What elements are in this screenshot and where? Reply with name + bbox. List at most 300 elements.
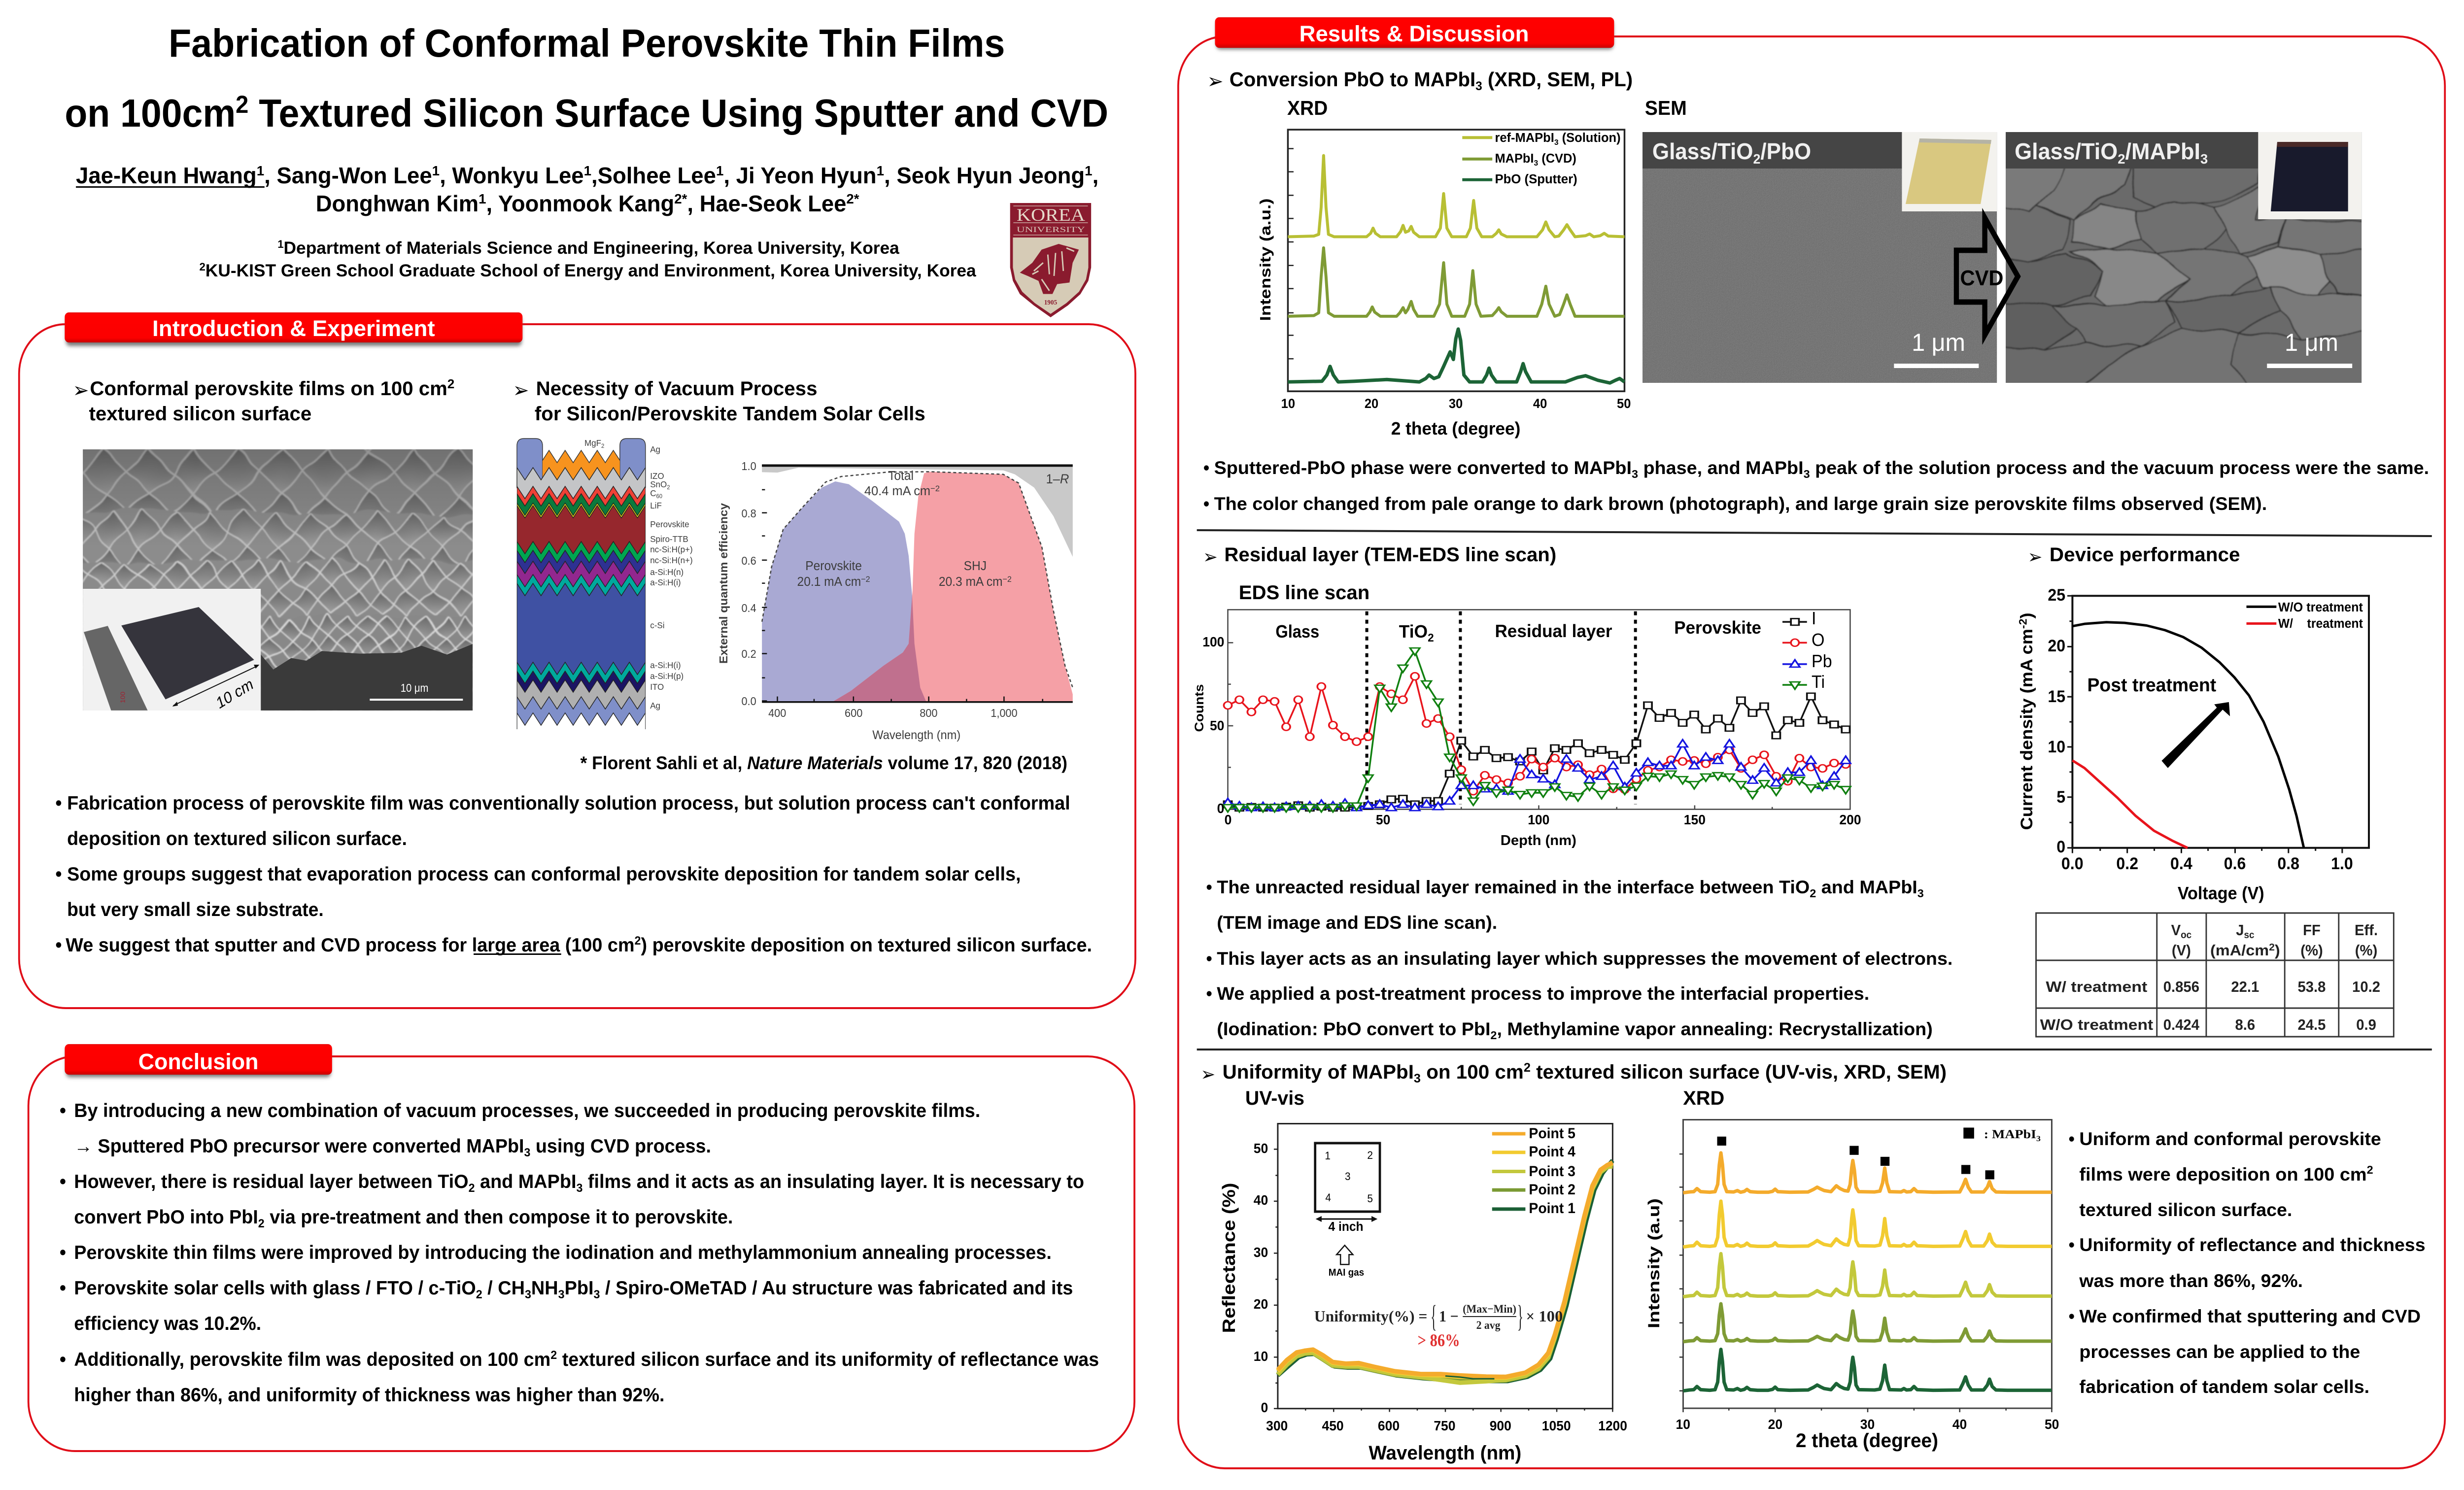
formula: uniformity — [1314, 1300, 1563, 1350]
chart: J-V curve: Voltage (V) — [2178, 883, 2264, 903]
authors — [76, 163, 1098, 216]
chart: J-V curve: 25 — [2048, 586, 2065, 605]
authors: 1 — [479, 191, 486, 206]
conclusion bullet text: Perovskite solar cells with glass / FTO / c-TiO — [74, 1278, 465, 1299]
bullets: uniformity: • — [2069, 1234, 2075, 1255]
chart: external quantum efficiency: 0.6 — [741, 554, 756, 567]
tandem cell layer stack diagram — [516, 438, 692, 729]
SEM image: Glass/TiO2/MAPbI3 — [1995, 128, 2376, 387]
SEM image: Glass/TiO2/PbO: 2 — [1753, 151, 1760, 167]
conclusion bullet text: • — [60, 1171, 66, 1192]
panel: Results & Discussion — [1178, 17, 2445, 1468]
conclusion bullet text: 3 — [524, 1146, 530, 1159]
chart: external quantum efficiency: 1,000 — [991, 707, 1018, 719]
conclusion bullet text: textured silicon surface and its uniformity of reflectance was — [557, 1349, 1099, 1370]
chart: XRD uniformity: Intensity (a.u) — [1645, 1198, 1663, 1328]
SEM image: Glass/TiO2/PbO — [1643, 132, 1997, 383]
inset: sample measurement points: 5 — [1367, 1192, 1373, 1205]
chart: XRD uniformity: 50 — [2045, 1416, 2059, 1432]
chart: UV-vis reflectance: Point 4 — [1529, 1144, 1576, 1160]
bullets: residual layer: 3 — [1917, 887, 1924, 900]
bullets: residual layer: 2 — [1810, 887, 1816, 900]
inset: sample measurement points: 4 inch — [1329, 1219, 1364, 1234]
chart: J-V curve: 0.0 — [2061, 854, 2084, 873]
table: device parameters: 0.856 — [2163, 979, 2199, 995]
chart: UV-vis reflectance — [1219, 1120, 2426, 1464]
inset: sample measurement points: 2 — [1367, 1149, 1373, 1161]
heading: device performance: ➢ — [2028, 546, 2043, 568]
bullets: residual layer: • — [1206, 877, 1212, 897]
authors: 2* — [674, 191, 687, 206]
chart: EDS line scan: Residual layer — [1495, 621, 1612, 641]
chart: XRD of PbO and MAPbI3: (Solution) — [1559, 131, 1621, 145]
chart: UV-vis reflectance: Point 1 — [1529, 1200, 1575, 1217]
tandem cell layer stack diagram: 2 — [601, 443, 604, 449]
bullets: uniformity: films were deposition on 100 cm — [2079, 1164, 2344, 1185]
conclusion bullet text: using CVD process. — [530, 1136, 711, 1157]
conclusion bullet text: films and it acts as an insulating layer. It is necessary to — [582, 1171, 1084, 1192]
panel: Conclusion — [29, 1044, 1134, 1451]
conclusion bullet text: Additionally, perovskite film was deposited on 100 cm — [74, 1349, 539, 1370]
chart: UV-vis reflectance: Point 2 — [1529, 1182, 1575, 1198]
table: device parameters: 0.9 — [2356, 1016, 2376, 1033]
chart: EDS line scan: 50 — [1210, 717, 1224, 733]
heading: necessity of vacuum process: for Silicon/Perovskite Tandem Solar Cells — [535, 403, 925, 425]
affiliations — [199, 238, 977, 280]
chart: XRD of PbO and MAPbI3: 20 — [1365, 396, 1378, 411]
heading: uniformity: 2 — [1524, 1061, 1531, 1075]
chart: EDS line scan: 100 — [1528, 812, 1549, 827]
chart: UV-vis reflectance: Point 5 — [1529, 1125, 1575, 1142]
SEM image: Glass/TiO2/MAPbI3: /MAPbI — [2125, 139, 2200, 164]
tandem cell layer stack diagram: Perovskite — [650, 519, 689, 529]
bullets: residual layer: • — [1206, 983, 1212, 1004]
chart: XRD uniformity: 20 — [1768, 1416, 1782, 1432]
formula: uniformity: 1 − — [1439, 1307, 1459, 1325]
bullets: uniformity: • — [2069, 1306, 2075, 1326]
chart: UV-vis reflectance: 10 — [1254, 1348, 1268, 1364]
bullets: uniformity — [2069, 1128, 2426, 1397]
section tag: Conclusion: Conclusion — [138, 1050, 258, 1074]
inset: sample measurement points: MAI gas — [1329, 1267, 1364, 1278]
intro bullet text: • — [55, 793, 62, 814]
chart: EDS line scan: 0 — [1217, 800, 1224, 816]
chart: external quantum efficiency: −2 — [930, 484, 940, 493]
chart: XRD of PbO and MAPbI3: (CVD) — [1538, 151, 1576, 166]
intro bullet text: but very small size substrate. — [67, 899, 324, 920]
chart: EDS line scan: I — [1812, 609, 1816, 628]
table: device parameters: 10.2 — [2352, 979, 2380, 995]
bullets: uniformity: fabrication of tandem solar cells. — [2079, 1376, 2369, 1397]
chart: EDS line scan: Depth (nm) — [1501, 832, 1576, 848]
conclusion bullet text — [60, 1100, 1099, 1406]
heading: conformal films: textured silicon surface — [89, 403, 311, 425]
label: SEM: SEM — [1645, 97, 1687, 119]
section tag: Introduction & Experiment — [65, 312, 522, 346]
heading: uniformity: ➢ — [1200, 1063, 1215, 1085]
conclusion bullet text: • — [60, 1242, 66, 1263]
chart: external quantum efficiency — [718, 460, 1073, 742]
tandem cell layer stack diagram: c-Si — [650, 620, 664, 630]
chart: J-V curve: 1.0 — [2331, 854, 2353, 873]
chart: UV-vis reflectance: 30 — [1254, 1244, 1268, 1260]
chart: UV-vis reflectance: 1050 — [1542, 1418, 1571, 1433]
title — [65, 22, 1108, 135]
logo: Korea University crest: UNIVERSITY — [1017, 226, 1085, 234]
table: device parameters: J — [2236, 922, 2244, 939]
table: device parameters: 53.8 — [2297, 979, 2326, 995]
chart: UV-vis reflectance: Point 3 — [1529, 1163, 1575, 1180]
authors: , Hae-Seok Lee — [687, 191, 846, 216]
chart: XRD uniformity: 3 — [2036, 1135, 2041, 1143]
chart: UV-vis reflectance: 1200 — [1598, 1418, 1627, 1433]
chart: XRD of PbO and MAPbI3 — [1257, 130, 1631, 439]
chart: external quantum efficiency: 400 — [768, 707, 786, 719]
chart: XRD of PbO and MAPbI3: ref-MAPbI — [1495, 131, 1552, 145]
chart: EDS line scan: Pb — [1812, 651, 1832, 671]
conclusion bullet text: / Spiro-OMeTAD / Au structure was fabricated and its — [600, 1278, 1073, 1299]
tandem cell layer stack diagram: LiF — [650, 501, 662, 510]
bullets: residual layer: , Methylamine vapor annealing: Recrystallization) — [1497, 1018, 1933, 1039]
label: EDS line scan: EDS line scan — [1239, 582, 1369, 604]
table: device parameters: 8.6 — [2235, 1016, 2255, 1033]
tandem cell layer stack diagram: 60 — [656, 493, 663, 500]
authors: 1 — [877, 163, 884, 178]
chart: UV-vis reflectance: 50 — [1254, 1140, 1268, 1156]
bullets: residual layer: 2 — [1490, 1029, 1497, 1042]
chart: J-V curve: 0.4 — [2170, 854, 2192, 873]
chart: J-V curve — [2017, 586, 2369, 903]
chart: external quantum efficiency: 0.2 — [741, 647, 756, 660]
tandem cell layer stack diagram: a-Si:H(p) — [650, 671, 684, 681]
chart: external quantum efficiency: 0.8 — [741, 507, 756, 520]
chart: external quantum efficiency: −2 — [861, 575, 870, 584]
panel border — [19, 324, 1135, 1008]
chart: J-V curve: -2 — [2017, 619, 2029, 629]
table: device parameters: W/O treatment — [2040, 1016, 2153, 1033]
bullets: uniformity: processes can be applied to the — [2079, 1341, 2360, 1362]
conclusion bullet text: convert PbO into PbI — [74, 1207, 254, 1228]
bullets: conversion: 3 — [1804, 468, 1810, 480]
chart: EDS line scan: TiO — [1399, 622, 1427, 642]
chart: external quantum efficiency: 600 — [845, 707, 862, 719]
bullets: conversion: • — [1203, 493, 1209, 514]
intro bullet text: We suggest that sputter and CVD process for large area (100 cm — [66, 935, 620, 956]
chart: external quantum efficiency: Total — [888, 469, 914, 483]
chart: XRD of PbO and MAPbI3: 2 theta (degree) — [1391, 419, 1520, 439]
chart: EDS line scan: 200 — [1839, 812, 1861, 827]
chart: XRD of PbO and MAPbI3: 30 — [1449, 396, 1463, 411]
tandem cell layer stack diagram: nc-Si:H(p+) — [650, 544, 693, 554]
inset photo: 10 cm sample: 100 — [119, 691, 126, 703]
bullets: conversion — [1203, 457, 2429, 514]
authors: 1 — [584, 163, 591, 178]
conclusion bullet text: 2 — [469, 1181, 475, 1194]
chart: EDS line scan: 100 — [1202, 634, 1224, 649]
SEM image: Glass/TiO2/PbO: /PbO — [1760, 139, 1811, 164]
chart: external quantum efficiency: External quantum efficiency — [718, 503, 730, 664]
title: Fabrication of Conformal Perovskite Thin Films — [169, 22, 1005, 65]
photo inset: MAPbI3 film — [2258, 132, 2361, 219]
bullets: uniformity: • — [2069, 1128, 2075, 1149]
table: device parameters: 0.424 — [2163, 1016, 2199, 1033]
chart: external quantum efficiency: 1.0 — [741, 460, 756, 473]
bullets: residual layer: (TEM image and EDS line scan). — [1217, 912, 1497, 933]
SEM image: textured silicon pyramids — [83, 449, 473, 711]
inset: sample measurement points: 4 — [1325, 1191, 1331, 1204]
heading: conformal films: Conformal perovskite films on 100 cm — [90, 378, 426, 400]
authors: 2* — [846, 191, 859, 206]
logo: Korea University crest: 1905 — [1044, 299, 1057, 306]
tandem cell layer stack diagram: a-Si:H(n) — [650, 567, 684, 577]
chart: XRD of PbO and MAPbI3: 10 — [1281, 396, 1295, 411]
heading: conversion PbO to MAPbI3: (XRD, SEM, PL) — [1482, 68, 1633, 91]
chart: UV-vis reflectance: 450 — [1322, 1418, 1344, 1433]
conclusion bullet text: 2 — [476, 1287, 482, 1301]
table: device parameters: (%) — [2300, 942, 2323, 959]
affiliations: 2 — [199, 261, 205, 273]
inset photo: 10 cm sample — [83, 589, 261, 712]
intro bullet text: • — [55, 864, 62, 885]
conclusion bullet text: → Sputtered PbO precursor were converted MAPbI — [74, 1136, 514, 1157]
intro bullet text: deposition on textured silicon surface. — [67, 828, 407, 849]
chart: XRD of PbO and MAPbI3: 3 — [1554, 138, 1559, 147]
title: 2 — [236, 91, 248, 118]
chart: J-V curve: Post treatment — [2087, 675, 2216, 695]
formula: uniformity: (Max−Min) — [1463, 1302, 1516, 1315]
conclusion bullet text: By introducing a new combination of vacuum processes, we succeeded in producing perovskite films. — [74, 1100, 980, 1121]
conclusion bullet text: 3 — [594, 1287, 600, 1301]
authors: , Yoonmook Kang — [486, 191, 674, 216]
bullets: residual layer: The unreacted residual layer remained in the interface between TiO — [1217, 877, 1766, 897]
conclusion bullet text: higher than 86%, and uniformity of thickness was higher than 92%. — [74, 1385, 665, 1406]
conclusion bullet text: • — [60, 1349, 66, 1370]
conclusion bullet text: / CH — [482, 1278, 525, 1299]
bullets: uniformity: 2 — [2367, 1163, 2373, 1176]
conclusion bullet text: PbI — [565, 1278, 594, 1299]
title: Textured Silicon Surface Using Sputter and CVD — [248, 92, 1108, 135]
affiliations: 1 — [277, 238, 284, 250]
chart: XRD of PbO and MAPbI3: 40 — [1533, 396, 1547, 411]
chart: UV-vis reflectance: Reflectance (%) — [1219, 1183, 1239, 1333]
table: device parameters: FF — [2303, 922, 2321, 939]
authors: , Sang-Won Lee — [264, 163, 432, 188]
formula: uniformity: { — [1431, 1300, 1437, 1333]
conclusion bullet text: • — [60, 1278, 66, 1299]
inset photo: 10 cm sample: 10 cm — [213, 675, 256, 712]
inset: sample measurement points: 3 — [1345, 1170, 1351, 1183]
table: device parameters: Eff. — [2355, 922, 2378, 939]
chart: XRD uniformity — [1645, 1120, 2059, 1452]
tandem cell layer stack diagram: IZO — [650, 471, 664, 481]
SEM image: Glass/TiO2/PbO: 1 μm — [1912, 329, 1965, 356]
inset: sample measurement points: 1 — [1325, 1150, 1331, 1162]
chart: EDS line scan: Glass — [1275, 622, 1319, 642]
section tag: Introduction & Experiment: Introduction & Experiment — [152, 316, 435, 341]
authors: 1 — [716, 163, 723, 178]
conclusion bullet text: and MAPbI — [475, 1171, 576, 1192]
table: device parameters: sc — [2244, 930, 2255, 941]
chart: EDS line scan: Counts — [1193, 684, 1206, 732]
bullets: conversion: peak of the solution process and the vacuum process were the same. — [1810, 457, 2429, 478]
tandem cell layer stack diagram: a-Si:H(i) — [650, 577, 681, 587]
chart: EDS line scan: Ti — [1812, 672, 1825, 692]
heading: conversion PbO to MAPbI3: 3 — [1475, 79, 1482, 93]
chart: XRD uniformity: 30 — [1860, 1416, 1875, 1432]
formula: uniformity: } — [1517, 1300, 1523, 1333]
heading: conformal films: ➢ — [72, 378, 89, 402]
chart: J-V curve: 10 — [2048, 738, 2065, 756]
heading: residual layer: ➢ — [1203, 546, 1218, 568]
conclusion bullet text: 2 — [550, 1348, 557, 1361]
conclusion bullet text: 3 — [558, 1287, 565, 1301]
tandem cell layer stack diagram: SnO — [650, 479, 667, 489]
chart: XRD of PbO and MAPbI3: 50 — [1617, 396, 1631, 411]
bullets: conversion: • — [1203, 457, 1209, 478]
authors: 1 — [1085, 163, 1093, 178]
chart: EDS line scan: 0 — [1225, 812, 1232, 827]
heading: necessity of vacuum process — [513, 378, 925, 425]
bullets: residual layer: • — [1206, 948, 1212, 969]
conclusion bullet text: via pre-treatment and then compose it to perovskite. — [265, 1207, 733, 1228]
SEM image: Glass/TiO2/PbO: Glass/TiO — [1652, 139, 1752, 164]
SEM image: Glass/TiO2/MAPbI3: 2 — [2118, 151, 2125, 167]
conclusion bullet text: • — [60, 1100, 66, 1121]
chart: XRD uniformity: 40 — [1952, 1416, 1967, 1432]
bullets: uniformity: was more than 86%, 92%. — [2079, 1270, 2303, 1291]
chart: external quantum efficiency: Wavelength (nm) — [872, 728, 960, 742]
chart: J-V curve: W/O treatment — [2278, 600, 2363, 614]
heading: necessity of vacuum process: Necessity of Vacuum Process — [536, 378, 817, 400]
chart: external quantum efficiency: Perovskite — [805, 559, 862, 573]
heading: conversion PbO to MAPbI3 — [1207, 68, 1633, 93]
chart: J-V curve: 15 — [2048, 687, 2065, 706]
table: device parameters: V — [2171, 922, 2181, 939]
authors: ,Solhee Lee — [591, 163, 716, 188]
chart: EDS line scan: 2 — [1428, 631, 1434, 644]
chart: external quantum efficiency: 20.3 mA cm — [939, 575, 1003, 589]
section tag: Results & Discussion: Results & Discussion — [1300, 22, 1529, 46]
formula: uniformity: × — [1526, 1307, 1535, 1325]
conclusion bullet text: efficiency was 10.2%. — [74, 1313, 261, 1334]
chart: J-V curve: treatment — [2307, 616, 2363, 631]
arrow: post treatment improvement — [2161, 702, 2230, 768]
label: XRD uniformity: XRD — [1683, 1087, 1724, 1109]
chart: J-V curve: 0.6 — [2224, 854, 2246, 873]
heading: uniformity: 3 — [1414, 1072, 1421, 1085]
chart: external quantum efficiency: 800 — [920, 707, 937, 719]
authors: , — [1093, 163, 1098, 188]
intro bullet text: ) perovskite deposition on textured silicon surface. — [641, 935, 1092, 956]
bullets: conversion: phase, and MAPbI — [1638, 457, 1804, 478]
intro bullet text — [55, 793, 1092, 956]
chart: XRD of PbO and MAPbI3: PbO (Sputter) — [1495, 172, 1577, 186]
arrow: CVD conversion: CVD — [1960, 266, 2003, 290]
chart: J-V curve: 0.8 — [2277, 854, 2299, 873]
conclusion bullet text: However, there is residual layer between TiO — [74, 1171, 458, 1192]
formula: uniformity: 100 — [1539, 1307, 1563, 1325]
table: device parameters: W/ treatment — [2046, 979, 2147, 995]
chart: external quantum efficiency: 0.4 — [741, 602, 756, 614]
chart: UV-vis reflectance: 600 — [1378, 1418, 1400, 1433]
table: device parameters: (mA/cm — [2210, 942, 2263, 959]
table: device parameters: 24.5 — [2297, 1016, 2326, 1033]
label: XRD: XRD — [1287, 97, 1328, 119]
authors: , Ji Yeon Hyun — [723, 163, 877, 188]
chart: EDS line scan: Perovskite — [1674, 618, 1761, 638]
chart: UV-vis reflectance: 0 — [1261, 1399, 1268, 1415]
table: device parameters: ) — [2275, 942, 2280, 959]
photo inset: PbO film — [1902, 132, 1997, 211]
heading: uniformity: on 100 cm — [1421, 1061, 1524, 1083]
SEM image: Glass/TiO2/MAPbI3: Glass/TiO — [2015, 139, 2114, 164]
chart: EDS line scan: O — [1812, 630, 1825, 650]
logo: Korea University crest — [1010, 203, 1091, 317]
chart: EDS line scan — [1193, 609, 1861, 848]
chart: J-V curve: 5 — [2056, 788, 2065, 807]
chart: J-V curve: W/ — [2278, 616, 2293, 631]
heading: uniformity: textured silicon surface (UV-vis, XRD, SEM) — [1531, 1061, 1947, 1083]
chart: external quantum efficiency: 0.0 — [741, 695, 756, 708]
chart: external quantum efficiency: SHJ — [964, 559, 987, 573]
table: device parameters: (V) — [2172, 942, 2191, 959]
tandem cell layer stack diagram: Ag — [650, 444, 660, 454]
authors: Jae-Keun Hwang — [76, 163, 248, 188]
heading: conformal films: 2 — [447, 377, 454, 391]
chart: UV-vis reflectance: 900 — [1490, 1418, 1511, 1433]
table: device parameters: 22.1 — [2231, 979, 2259, 995]
heading: necessity of vacuum process: ➢ — [513, 378, 529, 402]
chart: J-V curve: Current density (mA cm — [2018, 630, 2036, 830]
bullets: residual layer: We applied a post-treatment process to improve the interfacial properties. — [1217, 983, 1869, 1004]
chart: XRD uniformity: 10 — [1676, 1416, 1690, 1432]
chart: XRD of PbO and MAPbI3: MAPbI — [1495, 151, 1533, 166]
conclusion bullet text: 3 — [525, 1287, 531, 1301]
chart: UV-vis reflectance: 300 — [1266, 1418, 1288, 1433]
authors: Donghwan Kim — [316, 191, 472, 216]
tandem cell layer stack diagram: MgF — [584, 438, 601, 448]
chart: XRD of PbO and MAPbI3: 3 — [1534, 159, 1539, 168]
inset: sample measurement points — [1315, 1143, 1380, 1278]
chart: XRD uniformity: 2 theta (degree) — [1796, 1430, 1938, 1452]
heading: conversion PbO to MAPbI3: ➢ — [1207, 69, 1224, 93]
heading: device performance: Device performance — [2050, 544, 2240, 566]
heading: uniformity — [1200, 1061, 1947, 1085]
chart: EDS line scan: 50 — [1376, 812, 1390, 827]
bullets: uniformity: Uniformity of reflectance and thickness — [2079, 1234, 2426, 1255]
SEM image: Glass/TiO2/MAPbI3: 1 μm — [2285, 329, 2338, 356]
bullets: uniformity: textured silicon surface. — [2079, 1199, 2292, 1220]
conclusion bullet text: 2 — [258, 1217, 265, 1230]
chart: J-V curve: 20 — [2048, 637, 2065, 655]
intro bullet text: 2 — [635, 934, 641, 947]
bullets: conversion: Sputtered-PbO phase were converted to MAPbI — [1214, 457, 1601, 478]
chart: J-V curve: 0 — [2056, 838, 2065, 856]
intro bullet text: Some groups suggest that evaporation process can conformal perovskite deposition for tandem solar cells, — [67, 864, 1021, 885]
chart: external quantum efficiency: 40.4 mA cm — [864, 484, 928, 498]
arrow: CVD conversion — [1956, 218, 2018, 335]
formula: uniformity: > 86% — [1418, 1330, 1460, 1350]
chart: EDS line scan: 150 — [1684, 812, 1706, 827]
tandem cell layer stack diagram: Ag — [650, 701, 660, 711]
tandem cell layer stack diagram: a-Si:H(i) — [650, 660, 681, 670]
authors: 1 — [432, 163, 440, 178]
table: device parameters: (%) — [2355, 942, 2377, 959]
chart: XRD of PbO and MAPbI3: Intensity (a.u.) — [1257, 199, 1274, 321]
chart: UV-vis reflectance: 20 — [1254, 1296, 1268, 1312]
bullets: residual layer: and MAPbI — [1816, 877, 1917, 897]
chart: UV-vis reflectance: 40 — [1254, 1192, 1268, 1208]
